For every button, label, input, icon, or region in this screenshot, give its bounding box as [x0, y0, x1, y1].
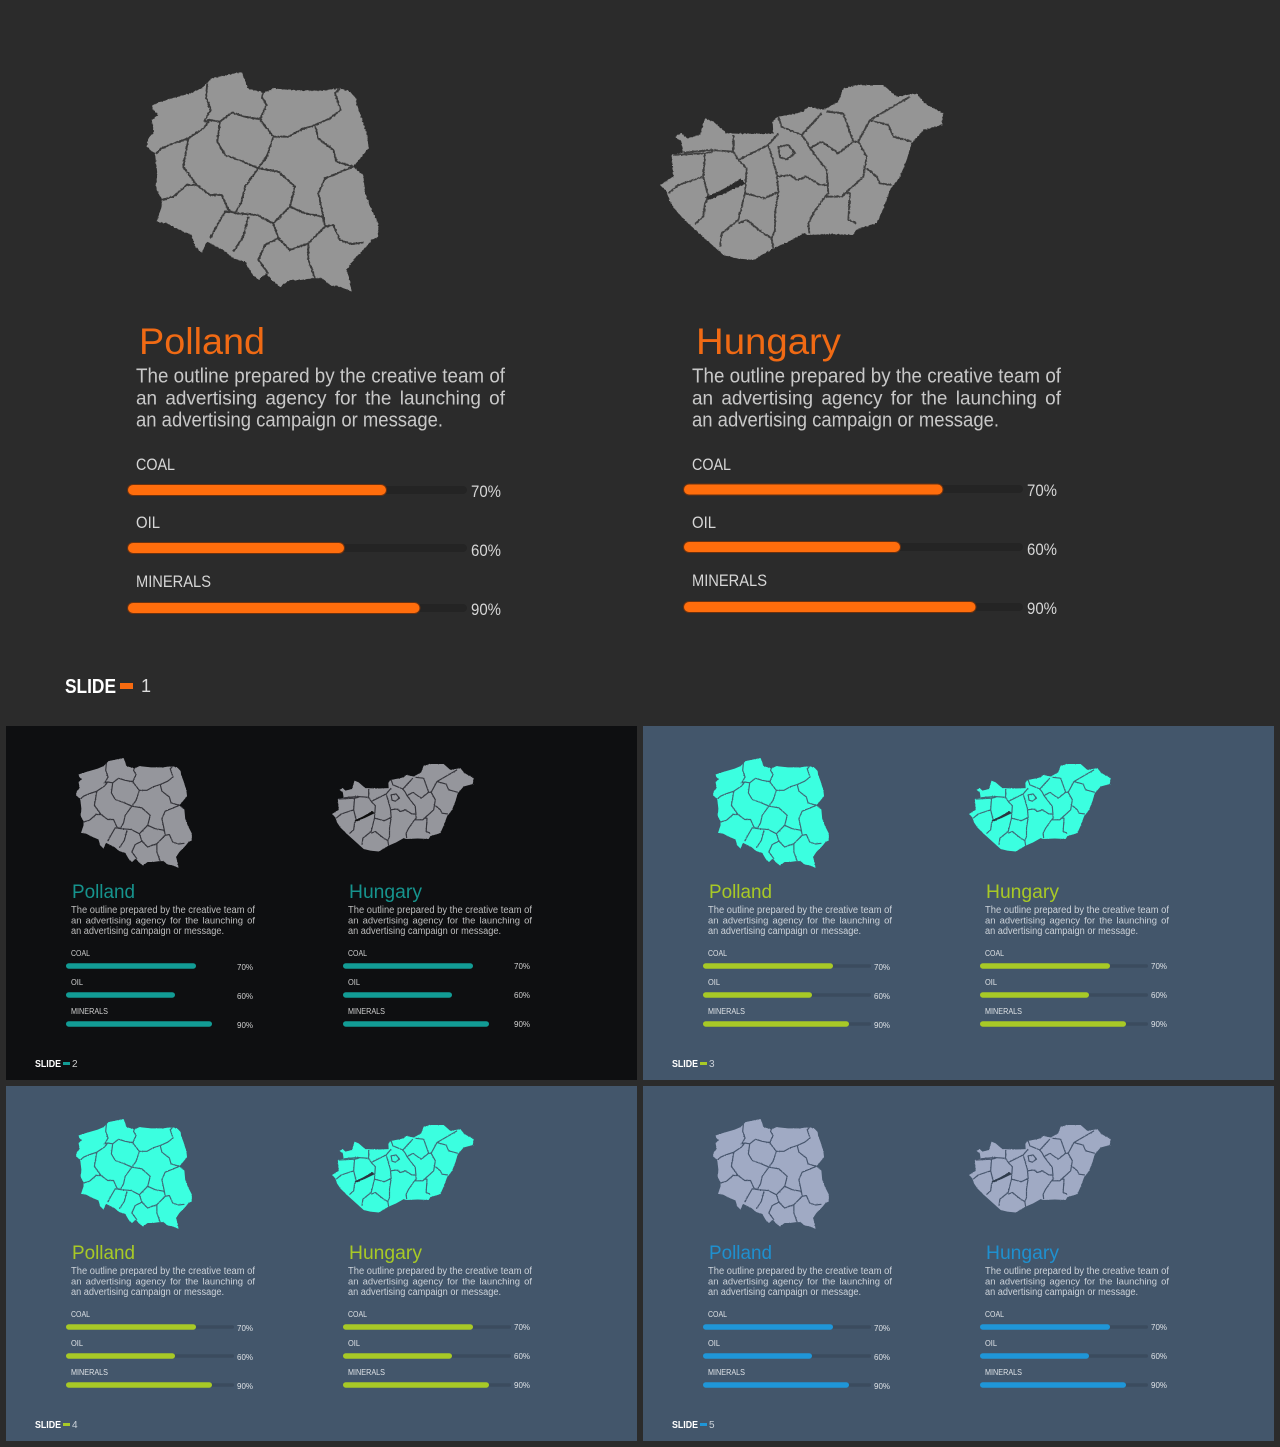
- text block: Hungary description: The outline prepared by the creative team of: [985, 905, 1169, 916]
- text block: Hungary description: an advertising agency for the launching of: [348, 916, 532, 926]
- heading: Polland: Polland: [709, 882, 772, 903]
- slide label 4: 4: [72, 1420, 78, 1431]
- slide label 1: SLIDE: [65, 676, 116, 698]
- slide label 5: 5: [709, 1420, 715, 1431]
- bar chart: Polland resources: 60%: [874, 1352, 890, 1362]
- bar chart: Polland resources: [66, 1309, 253, 1391]
- text block: Polland description: The outline prepared by the creative team of: [708, 905, 892, 916]
- text block: Hungary description: an advertising campaign or message.: [985, 926, 1138, 937]
- text block: Hungary description: an advertising agency for the launching of: [985, 916, 1169, 926]
- map: Poland: [76, 758, 192, 868]
- bar chart: Polland resources: [127, 455, 501, 619]
- text block: Hungary description: [985, 1266, 1169, 1298]
- text block: Hungary description: an advertising agency for the launching of: [985, 1276, 1169, 1288]
- bar chart: Hungary resources: MINERALS: [985, 1006, 1022, 1016]
- bar chart: Hungary resources: 60%: [1151, 1351, 1167, 1361]
- bar chart: Polland resources: 60%: [471, 541, 501, 560]
- bar chart: Hungary resources: 70%: [1027, 481, 1057, 500]
- bar chart: Polland resources: COAL: [136, 455, 175, 474]
- bar chart: Polland resources: 70%: [237, 962, 253, 972]
- text block: Hungary description: an advertising campaign or message.: [985, 1287, 1138, 1298]
- bar chart: Polland resources: OIL: [71, 1338, 83, 1348]
- map: Poland: [147, 72, 378, 292]
- bar chart: Polland resources: 60%: [237, 991, 253, 1001]
- bar chart: Polland resources: MINERALS: [708, 1006, 745, 1016]
- text block: Polland description: The outline prepared by the creative team of: [71, 905, 255, 916]
- bar chart: Polland resources: 90%: [237, 1381, 253, 1391]
- bar chart: Polland resources: COAL: [71, 1309, 90, 1319]
- bar chart: Hungary resources: COAL: [985, 948, 1004, 958]
- bar chart: Hungary resources: [343, 948, 530, 1029]
- bar chart: Hungary resources: MINERALS: [985, 1367, 1022, 1377]
- bar chart: Hungary resources: COAL: [348, 948, 367, 958]
- heading: Hungary: Hungary: [696, 321, 842, 362]
- bar chart: Polland resources: 60%: [874, 991, 890, 1001]
- bar chart: Polland resources: COAL: [71, 948, 90, 958]
- heading: Hungary: Hungary: [349, 882, 422, 903]
- bar chart: Hungary resources: 90%: [1027, 599, 1057, 618]
- bar chart: Polland resources: COAL: [708, 1309, 727, 1319]
- text block: Hungary description: [692, 366, 1062, 432]
- bar chart: Hungary resources: MINERALS: [348, 1006, 385, 1016]
- text block: Polland description: an advertising agency for the launching of: [136, 388, 506, 410]
- text block: Polland description: an advertising agency for the launching of: [708, 916, 892, 926]
- bar chart: Hungary resources: [343, 1309, 530, 1390]
- heading: Polland: Polland: [709, 1243, 772, 1264]
- bar chart: Polland resources: MINERALS: [708, 1367, 745, 1377]
- bar chart: Hungary resources: [980, 1309, 1167, 1390]
- slide label 1: 1: [141, 676, 151, 696]
- text block: Hungary description: The outline prepared by the creative team of: [985, 1266, 1169, 1277]
- text block: Polland description: The outline prepared by the creative team of: [71, 1266, 255, 1277]
- text block: Polland description: The outline prepared by the creative team of: [136, 366, 505, 388]
- bar chart: Polland resources: 70%: [874, 962, 890, 972]
- panel: slide 2: [6, 726, 637, 1080]
- slide label 4: [35, 1420, 78, 1431]
- bar chart: Hungary resources: 70%: [514, 961, 530, 971]
- text block: Hungary description: an advertising campaign or message.: [692, 410, 999, 432]
- text block: Polland description: [136, 366, 506, 432]
- bar chart: Hungary resources: COAL: [692, 455, 731, 474]
- heading: Polland: Polland: [72, 882, 135, 903]
- text block: Hungary description: an advertising campaign or message.: [348, 926, 501, 937]
- panel: slide 5: [643, 1086, 1274, 1441]
- bar chart: Hungary resources: OIL: [985, 977, 997, 987]
- bar chart: Hungary resources: 60%: [514, 990, 530, 1000]
- text block: Hungary description: The outline prepared by the creative team of: [348, 905, 532, 916]
- slide label 3: [672, 1059, 715, 1070]
- text block: Polland description: [71, 1266, 255, 1298]
- bar chart: Polland resources: OIL: [708, 977, 720, 987]
- heading: Hungary: Hungary: [986, 1243, 1059, 1264]
- text block: Hungary description: [348, 1266, 532, 1298]
- bar chart: Polland resources: 90%: [471, 600, 501, 619]
- slide label 5: [672, 1420, 715, 1431]
- text block: Polland description: an advertising campaign or message.: [708, 926, 861, 937]
- bar chart: Hungary resources: COAL: [348, 1309, 367, 1319]
- map: Hungary: [660, 85, 943, 260]
- heading: Polland: Polland: [139, 321, 265, 362]
- bar chart: Hungary resources: 70%: [1151, 1322, 1167, 1332]
- bar chart: Hungary resources: COAL: [985, 1309, 1004, 1319]
- map: Poland: [713, 1119, 829, 1229]
- slide label 2: [35, 1059, 78, 1070]
- text block: Polland description: an advertising campaign or message.: [71, 926, 224, 937]
- bar chart: Polland resources: 70%: [237, 1323, 253, 1333]
- slide label 1: [65, 676, 151, 698]
- panel: slide 4: [6, 1086, 637, 1441]
- map: Hungary: [969, 764, 1111, 852]
- panel: slide 3: [643, 726, 1274, 1080]
- map: Hungary: [969, 1125, 1111, 1213]
- text block: Hungary description: [985, 905, 1169, 937]
- slide label 5: SLIDE: [672, 1420, 698, 1431]
- bar chart: Hungary resources: MINERALS: [348, 1367, 385, 1377]
- heading: Hungary: Hungary: [349, 1243, 422, 1264]
- map: Hungary: [332, 764, 474, 852]
- bar chart: Hungary resources: [980, 948, 1167, 1029]
- bar chart: Hungary resources: OIL: [348, 1338, 360, 1348]
- bar chart: Hungary resources: 60%: [514, 1351, 530, 1361]
- text block: Hungary description: The outline prepared by the creative team of: [348, 1266, 532, 1277]
- map: Poland: [76, 1119, 192, 1229]
- bar chart: Hungary resources: OIL: [348, 977, 360, 987]
- text block: Polland description: an advertising agency for the launching of: [71, 916, 255, 926]
- bar chart: Polland resources: 90%: [874, 1020, 890, 1030]
- bar chart: Polland resources: MINERALS: [136, 572, 211, 591]
- slide label 3: SLIDE: [672, 1059, 698, 1070]
- bar chart: Hungary resources: MINERALS: [692, 571, 767, 590]
- bar chart: Hungary resources: 90%: [514, 1380, 530, 1390]
- bar chart: Polland resources: 90%: [237, 1020, 253, 1030]
- bar chart: Hungary resources: OIL: [985, 1338, 997, 1348]
- bar chart: Polland resources: 90%: [874, 1381, 890, 1391]
- text block: Polland description: [708, 1266, 892, 1298]
- bar chart: Hungary resources: 70%: [514, 1322, 530, 1332]
- text block: Hungary description: The outline prepared by the creative team of: [692, 366, 1061, 388]
- slide label 2: 2: [72, 1059, 78, 1070]
- bar chart: Polland resources: OIL: [71, 977, 83, 987]
- bar chart: Hungary resources: 90%: [514, 1019, 530, 1029]
- bar chart: Hungary resources: 90%: [1151, 1380, 1167, 1390]
- bar chart: Hungary resources: 70%: [1151, 961, 1167, 971]
- text block: Polland description: an advertising campaign or message.: [708, 1287, 861, 1298]
- text block: Polland description: [708, 905, 892, 937]
- bar chart: Polland resources: 70%: [874, 1323, 890, 1333]
- bar chart: Polland resources: OIL: [708, 1338, 720, 1348]
- slide label 3: 3: [709, 1059, 715, 1070]
- map: Hungary: [332, 1125, 474, 1213]
- panel: slide 1: [65, 72, 1062, 698]
- bar chart: Hungary resources: 60%: [1151, 990, 1167, 1000]
- text block: Polland description: an advertising campaign or message.: [136, 410, 443, 432]
- bar chart: Polland resources: MINERALS: [71, 1006, 108, 1016]
- text block: Hungary description: an advertising campaign or message.: [348, 1287, 501, 1298]
- slide label 2: SLIDE: [35, 1059, 61, 1070]
- bar chart: Polland resources: [703, 948, 890, 1030]
- bar chart: Hungary resources: [683, 455, 1057, 618]
- heading: Polland: Polland: [72, 1243, 135, 1264]
- text block: Hungary description: an advertising agency for the launching of: [692, 388, 1062, 410]
- text block: Polland description: The outline prepared by the creative team of: [708, 1266, 892, 1277]
- bar chart: Polland resources: [703, 1309, 890, 1391]
- heading: Hungary: Hungary: [986, 882, 1059, 903]
- map: Poland: [713, 758, 829, 868]
- bar chart: Polland resources: 60%: [237, 1352, 253, 1362]
- text block: Hungary description: [348, 905, 532, 937]
- text block: Hungary description: an advertising agency for the launching of: [348, 1276, 532, 1288]
- slide label 4: SLIDE: [35, 1420, 61, 1431]
- bar chart: Polland resources: [66, 948, 253, 1030]
- text block: Polland description: an advertising agency for the launching of: [708, 1276, 892, 1288]
- bar chart: Polland resources: 70%: [471, 482, 501, 501]
- bar chart: Hungary resources: 90%: [1151, 1019, 1167, 1029]
- text block: Polland description: [71, 905, 255, 937]
- text block: Polland description: an advertising campaign or message.: [71, 1287, 224, 1298]
- text block: Polland description: an advertising agency for the launching of: [71, 1276, 255, 1288]
- bar chart: Hungary resources: OIL: [692, 513, 716, 532]
- bar chart: Polland resources: OIL: [136, 513, 160, 532]
- bar chart: Polland resources: COAL: [708, 948, 727, 958]
- bar chart: Polland resources: MINERALS: [71, 1367, 108, 1377]
- bar chart: Hungary resources: 60%: [1027, 540, 1057, 559]
